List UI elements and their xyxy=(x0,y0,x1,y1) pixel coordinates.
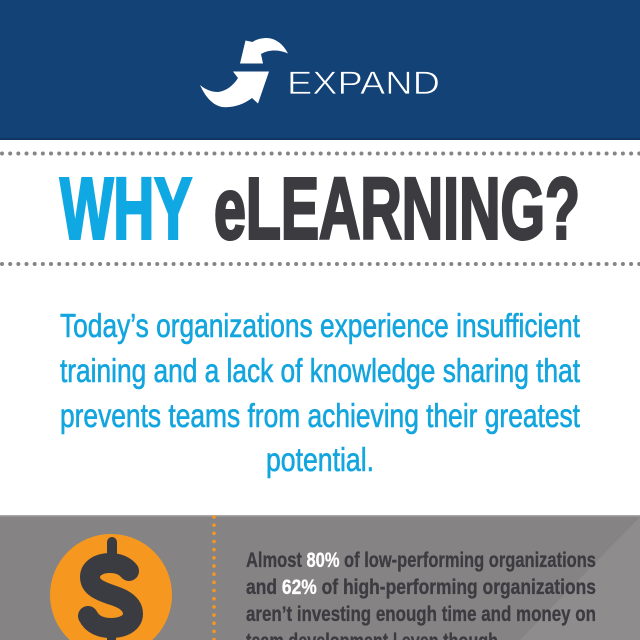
intro paragraph: potential. xyxy=(266,441,374,478)
logo icon: two arrows xyxy=(200,38,288,107)
header band with logo xyxy=(0,0,640,140)
bottom dotted divider xyxy=(2,262,640,266)
intro paragraph xyxy=(60,307,580,478)
dotted vertical divider xyxy=(212,517,216,640)
title: WHY xyxy=(60,160,192,258)
statistic text xyxy=(246,549,596,640)
top dotted divider xyxy=(2,152,640,156)
logo wordmark: EXPAND xyxy=(287,65,440,101)
icon: dollar coin xyxy=(50,534,172,640)
statistic panel xyxy=(0,515,640,640)
title xyxy=(60,160,580,258)
